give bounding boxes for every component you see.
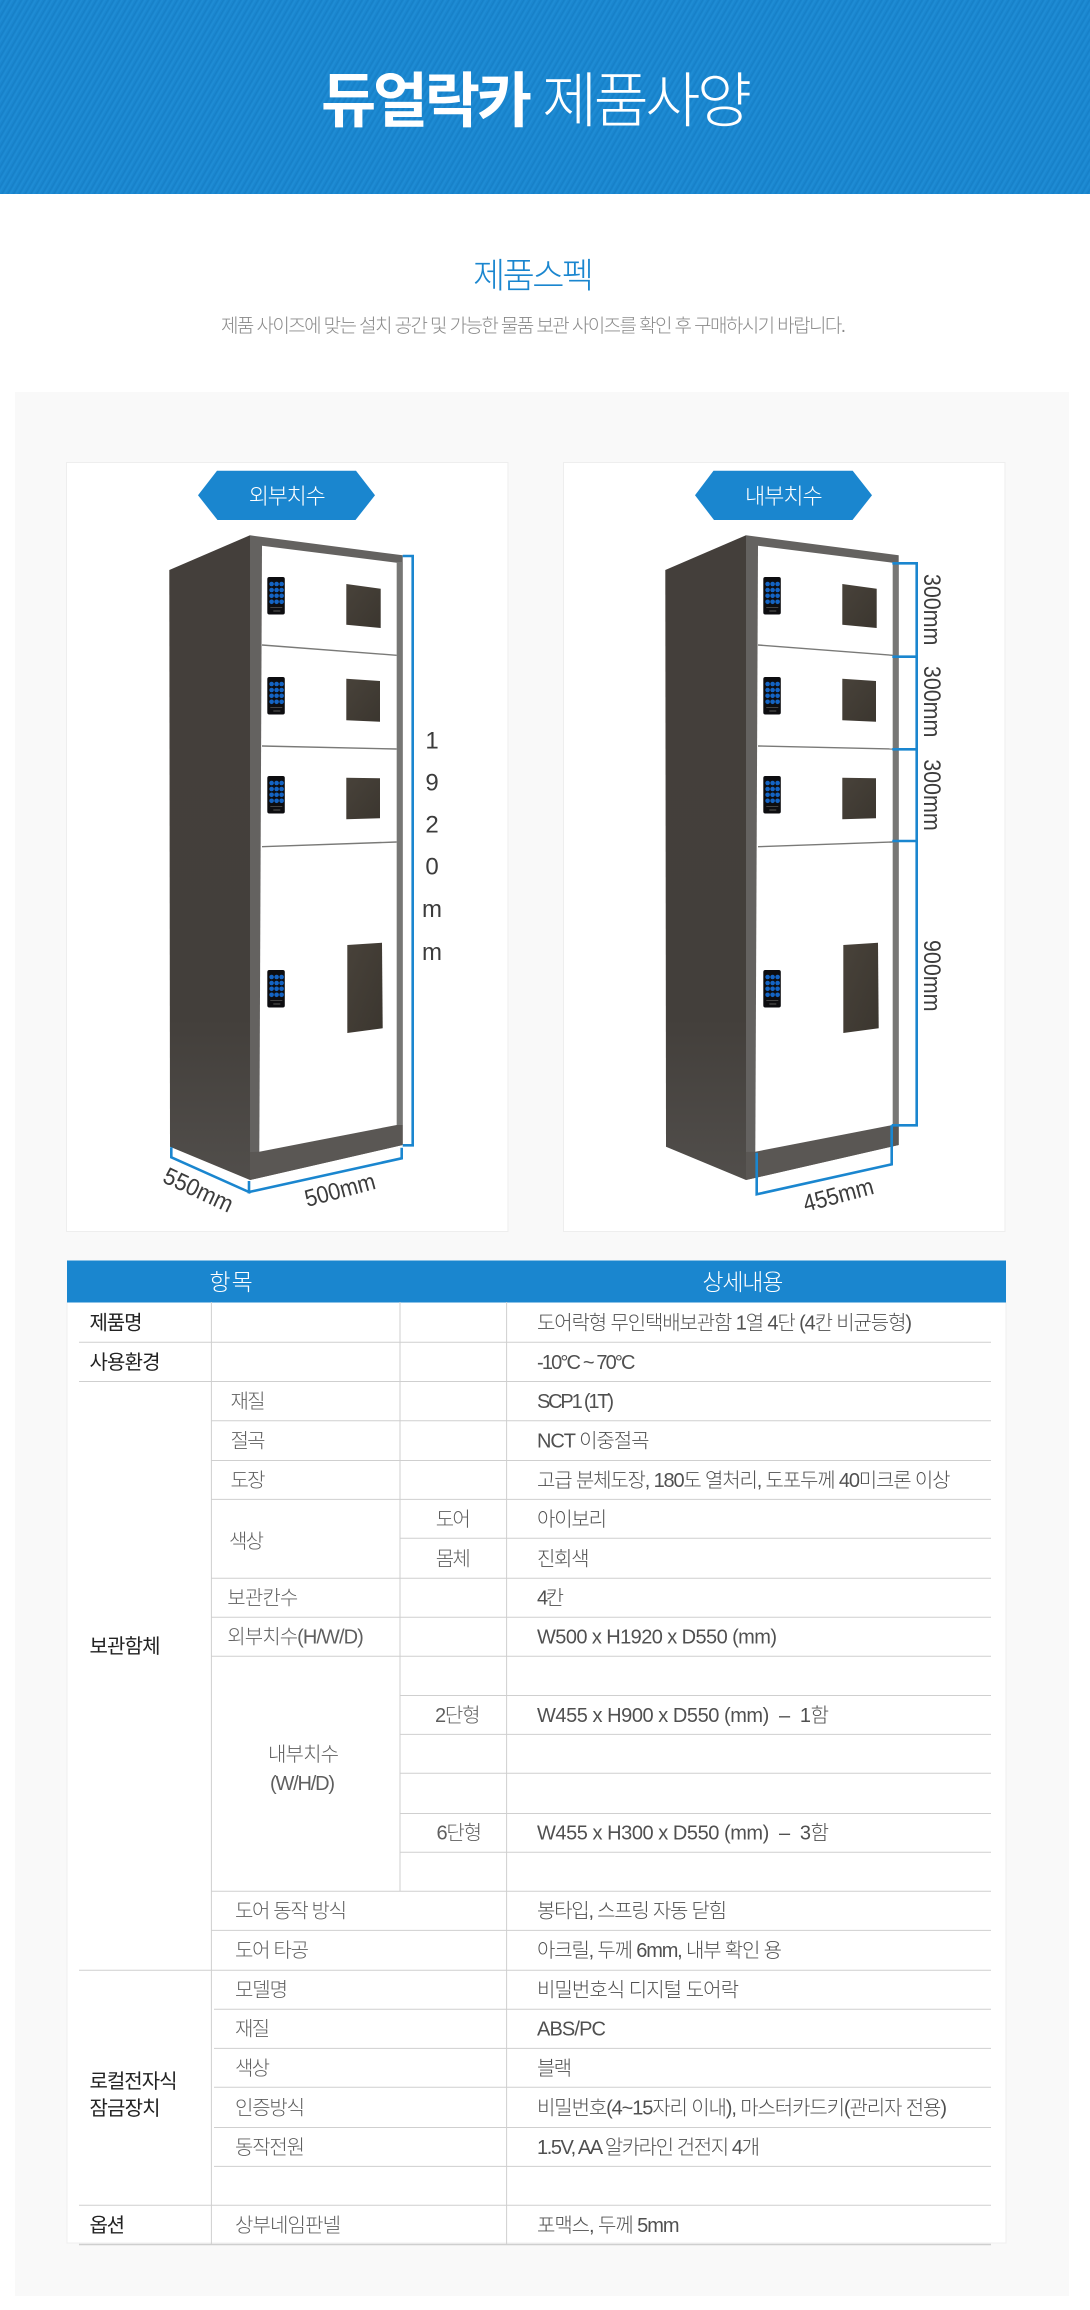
category column: 제품명 bbox=[90, 1312, 142, 1334]
sub item column bbox=[435, 1508, 482, 1844]
height label: 1 bbox=[425, 728, 439, 754]
spec table bbox=[67, 1260, 1006, 2244]
cabinet illustration: exterior bbox=[169, 535, 403, 1180]
detail column: 봉타입, 스프링 자동 닫힘 bbox=[537, 1900, 727, 1923]
detail column: 아크릴, 두께 6mm, 내부 확인 용 bbox=[537, 1939, 782, 1962]
compartment labels: 300mm bbox=[918, 759, 945, 831]
item column: (W/H/D) bbox=[270, 1773, 335, 1795]
compartment brackets bbox=[757, 563, 917, 1194]
detail column: 1.5V, AA 알카라인 건전지 4개 bbox=[537, 2136, 760, 2159]
panel: interior dimensions bbox=[564, 462, 1005, 1232]
depth and width brackets bbox=[171, 1147, 402, 1192]
compartment labels: 300mm bbox=[918, 574, 945, 645]
item column: 재질 bbox=[235, 2018, 270, 2041]
detail column: 포맥스, 두께 5mm bbox=[537, 2214, 680, 2237]
depth label: 550mm bbox=[159, 1163, 237, 1218]
item column bbox=[227, 1390, 364, 2237]
item column: 동작전원 bbox=[235, 2136, 305, 2159]
header banner bbox=[0, 0, 1090, 194]
badge: interior bbox=[695, 471, 872, 520]
height label: 9 bbox=[425, 770, 439, 796]
compartment labels: 900mm bbox=[918, 940, 945, 1011]
section heading: 제품스펙 bbox=[473, 257, 594, 296]
height bracket bbox=[403, 556, 413, 1145]
detail column: NCT 이중절곡 bbox=[537, 1430, 650, 1452]
panel: exterior dimensions bbox=[66, 462, 508, 1232]
table header: 상세내용 bbox=[702, 1269, 783, 1295]
height label: m bbox=[422, 896, 442, 923]
item column: 도어 타공 bbox=[235, 1939, 309, 1962]
width label: 500mm bbox=[302, 1168, 378, 1213]
height label bbox=[422, 728, 442, 966]
title bbox=[321, 68, 752, 135]
detail column: ABS/PC bbox=[537, 2019, 606, 2041]
item column: 모델명 bbox=[235, 1979, 288, 2002]
detail column: 4칸 bbox=[537, 1586, 564, 1610]
badge: exterior: 외부치수 bbox=[249, 484, 326, 509]
cabinet illustration: interior bbox=[665, 535, 899, 1180]
section description: 제품 사이즈에 맞는 설치 공간 및 가능한 물품 보관 사이즈를 확인 후 구매하시기 바랍니다. bbox=[221, 315, 846, 337]
item column: 인증방식 bbox=[235, 2096, 305, 2119]
badge: exterior bbox=[198, 471, 375, 520]
category column: 로컬전자식 bbox=[90, 2070, 178, 2093]
detail column: 블랙 bbox=[537, 2057, 572, 2080]
detail column: SCP1 (1T) bbox=[537, 1391, 614, 1413]
item column: 색상 bbox=[235, 2057, 270, 2080]
detail column: 도어락형 무인택배보관함 1열 4단 (4칸 비균등형) bbox=[537, 1312, 912, 1334]
interior width label: 455mm bbox=[800, 1173, 877, 1218]
table header: 항목 bbox=[209, 1269, 253, 1295]
detail column: 비밀번호식 디지털 도어락 bbox=[537, 1979, 739, 2002]
detail column: 아이보리 bbox=[537, 1508, 607, 1531]
detail column: -10°C ~ 70°C bbox=[537, 1352, 636, 1374]
item column: 재질 bbox=[230, 1390, 266, 1413]
height label: m bbox=[422, 939, 442, 966]
detail column: W455 x H900 x D550 (mm) – 1함 bbox=[537, 1704, 829, 1727]
item column: 도장 bbox=[230, 1469, 266, 1492]
title: 제품사양 bbox=[542, 68, 752, 135]
category column: 보관함체 bbox=[90, 1635, 160, 1658]
item column: 내부치수 bbox=[268, 1743, 339, 1766]
height label: 0 bbox=[425, 854, 439, 880]
compartment labels: 300mm bbox=[918, 666, 945, 737]
height label: 2 bbox=[425, 812, 439, 838]
sub item column: 2단형 bbox=[435, 1704, 480, 1727]
detail column: W500 x H1920 x D550 (mm) bbox=[537, 1626, 777, 1648]
detail column: 고급 분체도장, 180도 열처리, 도포두께 40미크론 이상 bbox=[537, 1469, 950, 1492]
sub item column: 도어 bbox=[436, 1508, 471, 1531]
detail column: 비밀번호(4~15자리 이내), 마스터카드키(관리자 전용) bbox=[537, 2096, 947, 2119]
spec background panel bbox=[15, 392, 1069, 2296]
table header bbox=[67, 1260, 1006, 1302]
category column: 옵션 bbox=[90, 2214, 125, 2237]
item column: 외부치수(H/W/D) bbox=[227, 1626, 364, 1648]
category column: 사용환경 bbox=[90, 1351, 160, 1374]
item column: 도어 동작 방식 bbox=[235, 1900, 347, 1923]
category column: 잠금장치 bbox=[90, 2097, 160, 2120]
sub item column: 몸체 bbox=[436, 1547, 471, 1570]
detail column bbox=[537, 1312, 950, 2237]
title: 듀얼락카 bbox=[321, 68, 532, 135]
detail column: W455 x H300 x D550 (mm) – 3함 bbox=[537, 1822, 829, 1844]
badge: interior: 내부치수 bbox=[745, 484, 823, 509]
compartment labels bbox=[918, 574, 945, 1012]
detail column: 진회색 bbox=[537, 1547, 590, 1570]
item column: 색상 bbox=[229, 1530, 264, 1553]
sub item column: 6단형 bbox=[436, 1822, 482, 1844]
item column: 보관칸수 bbox=[227, 1586, 298, 1610]
item column: 상부네임판넬 bbox=[235, 2214, 341, 2237]
item column: 절곡 bbox=[230, 1430, 266, 1452]
category column bbox=[90, 1312, 178, 2237]
